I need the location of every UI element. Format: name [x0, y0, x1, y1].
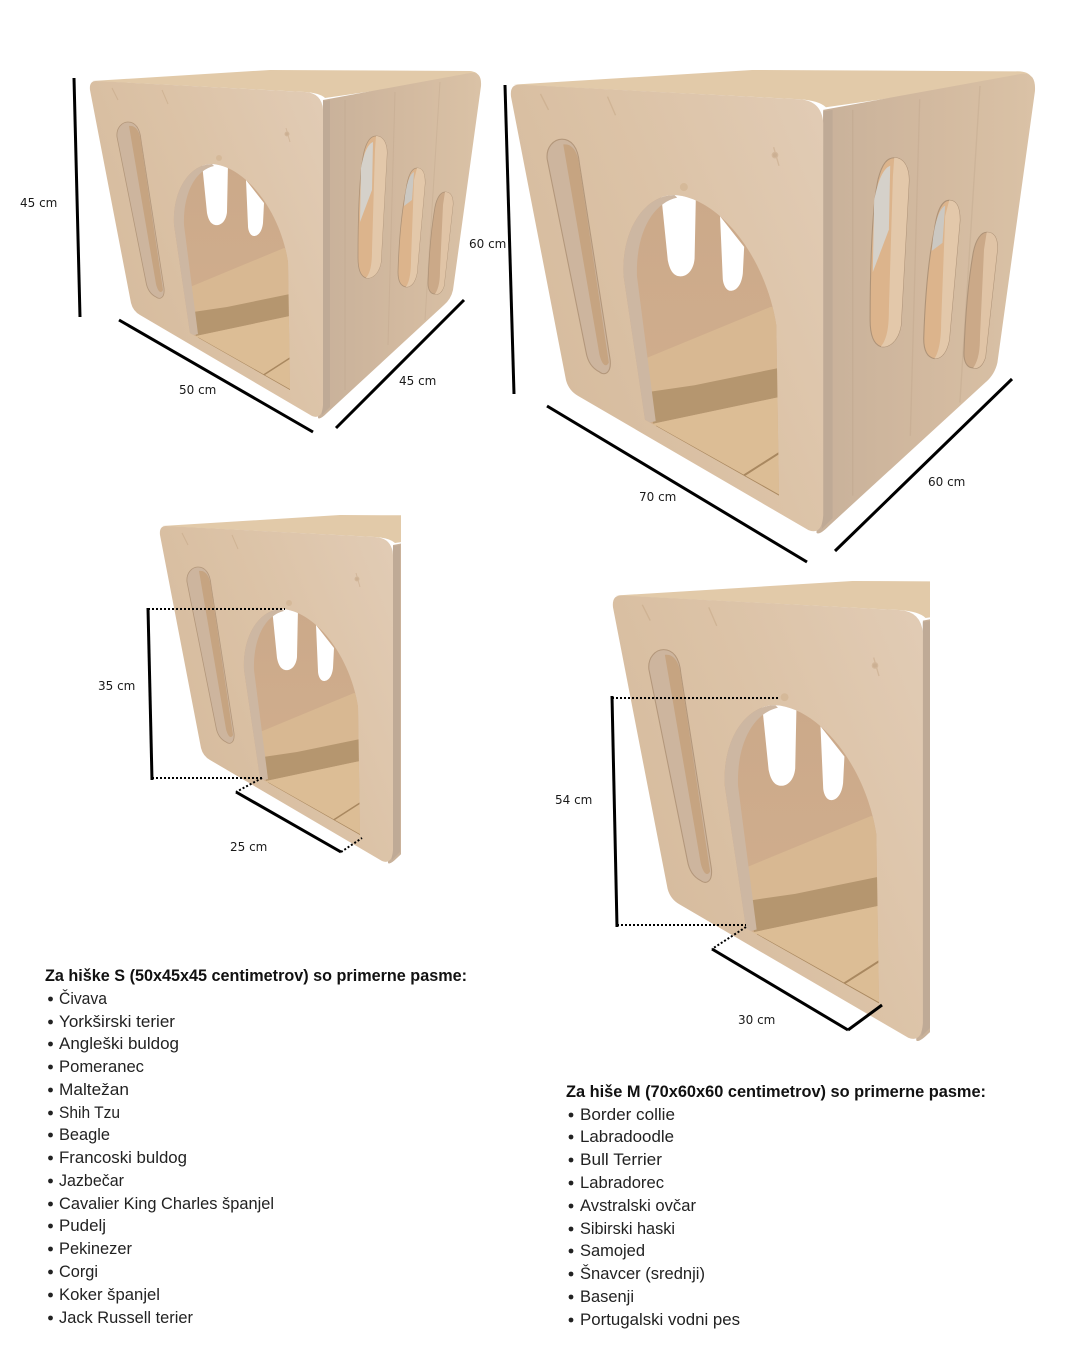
- house S cropped front view: [160, 515, 401, 864]
- label 60 cm height: 60 cm: [469, 237, 506, 251]
- breed list M: Bull Terrier: [580, 1150, 662, 1169]
- panel: small house door opening dimensions: [98, 515, 401, 864]
- breed list S: Shih Tzu: [59, 1103, 120, 1122]
- label 54 cm: 54 cm: [555, 793, 592, 807]
- width line 70 cm: [547, 406, 807, 562]
- door height line 54 cm: [612, 696, 778, 927]
- breed list S: Cavalier King Charles španjel: [59, 1194, 274, 1213]
- text block: breeds for house S: [45, 966, 467, 1327]
- heading: house S breeds: Za hiške S (50x45x45 centimetrov) so primerne pasme:: [45, 966, 467, 985]
- breed list M: Labradoodle: [580, 1127, 674, 1146]
- panel: medium house door opening dimensions: [556, 581, 930, 1041]
- breed list S: Pomeranec: [59, 1057, 144, 1076]
- breed list S: Čivava: [59, 989, 107, 1008]
- breed list S: Koker španjel: [59, 1285, 160, 1304]
- breed list S: Jack Russell terier: [59, 1308, 193, 1327]
- breed list S: Angleški buldog: [59, 1034, 179, 1053]
- label 70 cm: 70 cm: [639, 490, 676, 504]
- breed list S: Francoski buldog: [59, 1148, 187, 1167]
- door width line 25 cm: [236, 778, 362, 852]
- breed list S: Corgi: [59, 1262, 98, 1281]
- height line 60 cm: [505, 85, 514, 394]
- breed list M: Sibirski haski: [580, 1219, 675, 1238]
- breed list S: Beagle: [59, 1125, 110, 1144]
- breed list M: Basenji: [580, 1287, 634, 1306]
- depth line 45 cm: [336, 300, 464, 428]
- breed list S: Maltežan: [59, 1080, 129, 1099]
- breed list M: [569, 1105, 740, 1329]
- breed list S: Jazbečar: [59, 1171, 124, 1190]
- label 50 cm: 50 cm: [179, 383, 216, 397]
- label 30 cm: 30 cm: [738, 1013, 775, 1027]
- label 60 cm depth: 60 cm: [928, 475, 965, 489]
- house M cropped front view: [612, 581, 930, 1041]
- panel: medium house exterior with overall dimensions: [469, 70, 1035, 562]
- label 45 cm height: 45 cm: [20, 196, 57, 210]
- width line 50 cm: [119, 320, 313, 432]
- breed list M: Portugalski vodni pes: [580, 1310, 740, 1329]
- breed list M: Labradorec: [580, 1173, 664, 1192]
- breed list S: Yorkširski terier: [59, 1012, 175, 1031]
- heading: house M breeds: Za hiše M (70x60x60 centimetrov) so primerne pasme:: [566, 1082, 986, 1101]
- depth line 60 cm: [835, 379, 1012, 551]
- label 35 cm: 35 cm: [98, 679, 135, 693]
- breed list S: Pekinezer: [59, 1239, 132, 1258]
- breed list M: Samojed: [580, 1241, 645, 1260]
- breed list S: [48, 989, 274, 1327]
- door height line 35 cm: [148, 608, 285, 780]
- door width line 30 cm: [712, 927, 882, 1030]
- height line 45 cm: [74, 78, 80, 317]
- label 45 cm depth: 45 cm: [399, 374, 436, 388]
- house S photo: [90, 70, 481, 418]
- breed list M: Šnavcer (srednji): [580, 1264, 705, 1283]
- text block: breeds for house M: [566, 1082, 986, 1329]
- label 25 cm: 25 cm: [230, 840, 267, 854]
- panel: small house exterior with overall dimensions: [20, 70, 481, 432]
- house M photo: [511, 70, 1035, 533]
- breed list M: Border collie: [580, 1105, 675, 1124]
- breed list M: Avstralski ovčar: [580, 1196, 696, 1215]
- breed list S: Pudelj: [59, 1216, 106, 1235]
